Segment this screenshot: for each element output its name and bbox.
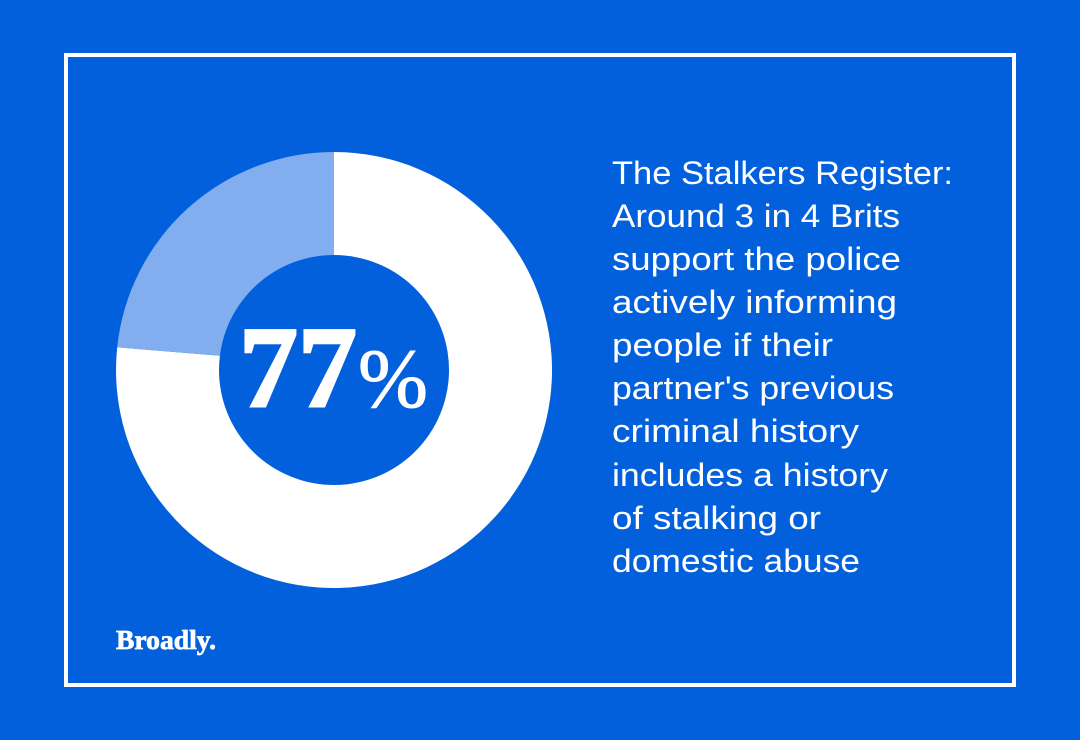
description text: actively informing	[612, 284, 897, 320]
description text: Around 3 in 4 Brits	[612, 198, 900, 234]
centre value: 77%: 77	[239, 304, 357, 432]
description text: includes a history	[612, 457, 888, 493]
donut segment: 77% white	[116, 152, 552, 588]
description text: The Stalkers Register:	[612, 155, 953, 191]
logo: Broadly: Broadly.	[116, 625, 216, 655]
description text: partner's previous	[612, 370, 894, 406]
description text	[612, 155, 953, 579]
donut segment: 23% light blue	[117, 152, 334, 356]
description text: domestic abuse	[612, 543, 860, 579]
donut chart: 77%	[116, 152, 552, 588]
centre value: 77%: %	[358, 333, 428, 426]
centre value: 77%	[239, 304, 428, 432]
description text: criminal history	[612, 413, 859, 449]
description text: of stalking or	[612, 500, 821, 536]
description text: people if their	[612, 327, 833, 363]
description text: support the police	[612, 241, 901, 277]
white frame	[66, 55, 1014, 685]
